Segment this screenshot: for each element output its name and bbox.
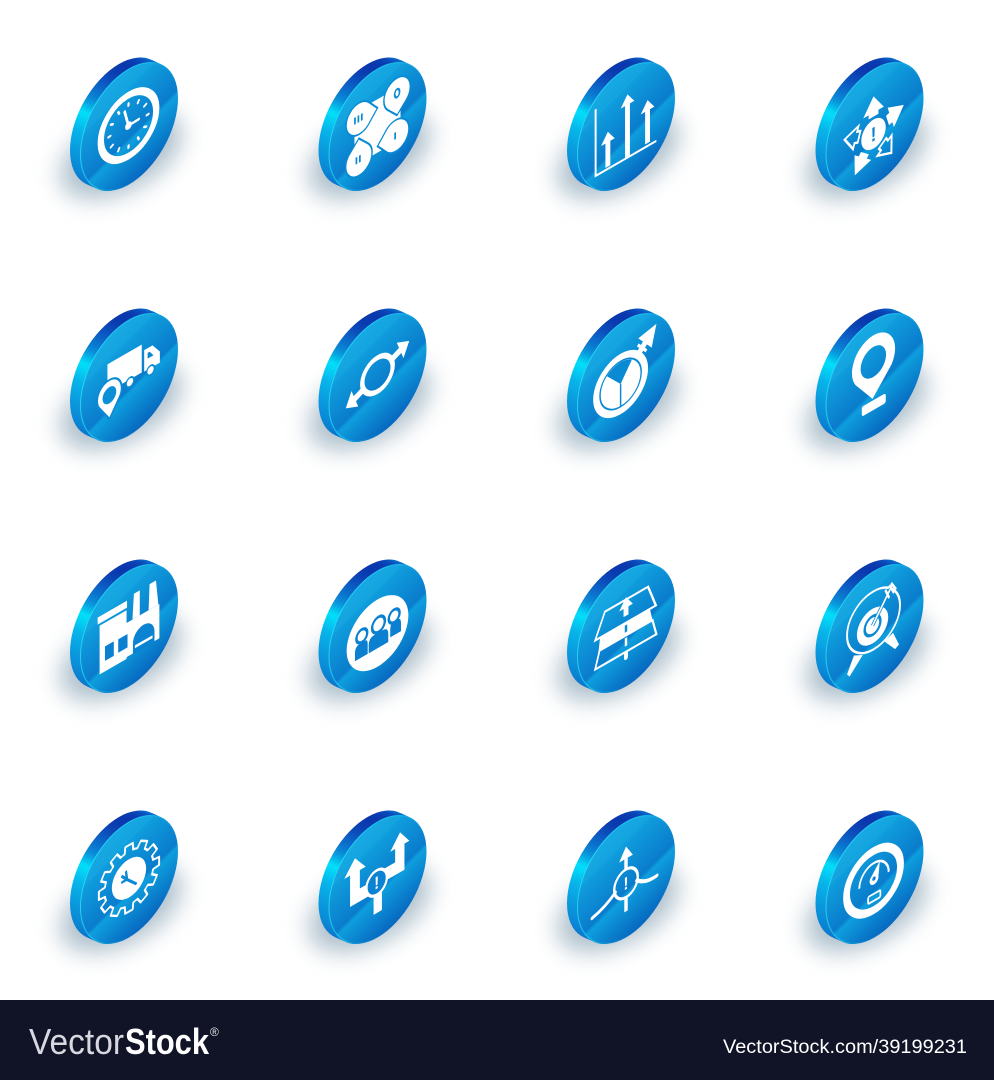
disc: factory: [46, 538, 196, 719]
icon: three people in a white circle: [347, 582, 408, 685]
disc: people group: [294, 538, 445, 719]
icon: junction lines and arrow: !: [624, 872, 628, 895]
icon: radial arrows: !: [871, 122, 876, 148]
disc: five arrows with exclamation: [791, 36, 942, 217]
icon: pie chart and arrow: [593, 311, 663, 430]
footer bar: [0, 1000, 994, 1080]
footer image id: VectorStock.com/39199231: [723, 1036, 967, 1058]
footer logo: ®: [210, 1025, 219, 1039]
icon: gear and wrench: [99, 828, 159, 929]
disc: location pin: [791, 287, 942, 468]
disc: speedometer gauge: [791, 789, 942, 970]
disc: target with arrow: [791, 538, 942, 719]
disc: crossroads with exclamation: [543, 789, 693, 970]
disc: fork arrows with exclamation: [294, 789, 445, 970]
icon: rising arrows chart: [596, 74, 656, 176]
disc: bar chart with arrows: [543, 36, 693, 217]
icon: big pin with base: [852, 323, 895, 422]
icon: archery target: [847, 576, 900, 678]
icon: junction lines and arrow: [592, 829, 657, 931]
icon: pins around a square: [346, 70, 410, 183]
footer logo: Vector: [29, 1021, 124, 1062]
icon: clock: [101, 79, 156, 172]
icon: split path arrows: !: [374, 871, 379, 894]
icon: gauge: [847, 836, 900, 926]
icon: factory building: [98, 578, 159, 676]
icon: radial arrows: [842, 77, 907, 190]
icon: truck with location pin: [97, 334, 160, 426]
disc: gear with wrench: [46, 789, 196, 970]
icon: split path arrows: [344, 827, 409, 932]
disc: road signs: [543, 538, 693, 719]
disc: delivery truck and pin: [46, 287, 196, 468]
icon: layered road map: [595, 580, 656, 678]
footer logo: [29, 1021, 219, 1062]
disc: four location pins: [294, 36, 445, 217]
disc: circle with two arrows: [294, 287, 445, 468]
disc: clock: [46, 36, 196, 217]
footer logo: Stock: [125, 1021, 210, 1062]
disc: pie chart with arrow: [543, 287, 693, 468]
icon: two-way arrow ring: [342, 329, 413, 420]
